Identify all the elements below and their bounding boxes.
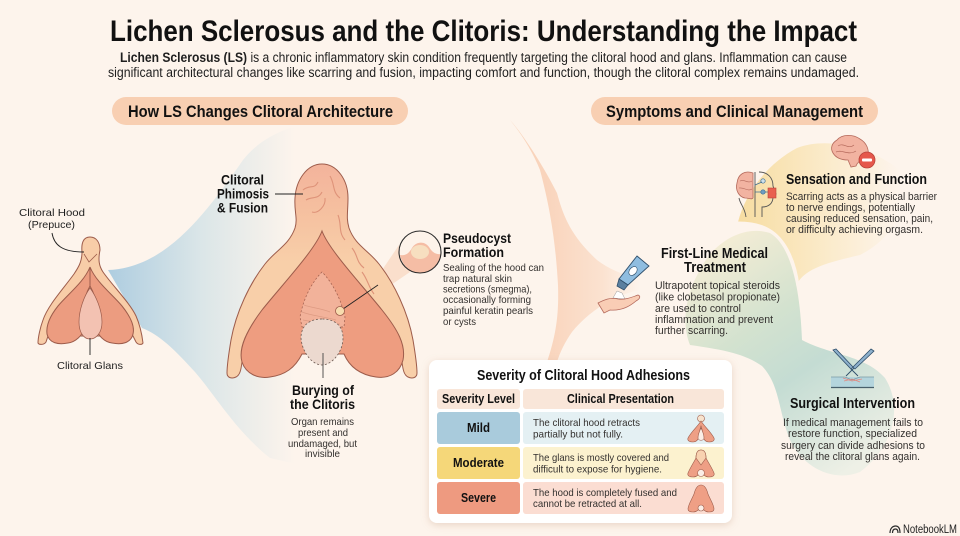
text: surgical intervention: restore function, specialized [788, 428, 917, 440]
text: sensation and function: causing reduced sensation, pain, [786, 213, 933, 225]
fused tissue over clitoris [300, 272, 345, 327]
diagram: anatomy with LS changes [227, 164, 417, 378]
text: surgical intervention: If medical management fails to [783, 417, 923, 429]
row: severe: Severe [461, 490, 496, 505]
text: pseudocyst formation: Sealing of the hood can [443, 262, 544, 274]
text: first-line medical treatment: First-Line Medical [661, 245, 768, 262]
text: first-line medical treatment [655, 245, 781, 337]
intro text: significant architectural changes like scarring and fusion, impacting comfort and function, though the clitoral complex remains undamaged. [108, 65, 859, 80]
row: moderate: The glans is mostly covered and [533, 452, 669, 464]
row: mild [437, 412, 724, 444]
label: burying of the clitoris: Organ remains [291, 416, 354, 428]
table header: Severity Level [442, 392, 515, 406]
text: surgical intervention: surgery can divide adhesions to [781, 440, 925, 452]
text: sensation and function: Scarring acts as a physical barrier [786, 191, 937, 203]
icon: surgical instruments [831, 349, 874, 388]
text: first-line medical treatment: Ultrapotent topical steroids [655, 280, 781, 292]
table header [437, 389, 724, 409]
left lobe [47, 267, 90, 344]
section heading: symptoms [591, 97, 878, 125]
buried glans [301, 319, 343, 365]
row: moderate: difficult to expose for hygiene. [533, 464, 662, 476]
pseudocyst marker [336, 285, 378, 316]
label: burying of the clitoris: the Clitoris [290, 396, 355, 412]
row: severe: cannot be retracted at all. [533, 498, 642, 510]
table header: Clinical Presentation [567, 392, 674, 406]
hood fold [84, 254, 97, 262]
text: surgical intervention: Surgical Intervention [790, 395, 915, 412]
glans [79, 288, 102, 339]
text: pseudocyst formation: occasionally forming [443, 294, 531, 306]
flow band: green treatment and surgery blob [685, 231, 894, 475]
diagram: normal anatomy [38, 237, 143, 344]
outer fused band [227, 164, 417, 378]
text: pseudocyst formation: or cysts [443, 316, 476, 328]
panel: severity table [429, 360, 732, 523]
row: moderate [437, 447, 724, 479]
row: severe: The hood is completely fused and [533, 487, 677, 499]
pale arc between yellow and green blobs [738, 223, 798, 286]
table title: Severity of Clitoral Hood Adhesions [477, 367, 690, 384]
icon: brain with minus sign [832, 135, 875, 168]
icon: mild [688, 415, 714, 442]
text: first-line medical treatment: inflammation and prevent [655, 314, 773, 326]
icon: steroid tube and hand [598, 256, 649, 313]
label: phimosis and fusion: & Fusion [217, 200, 268, 216]
text: pseudocyst formation: secretions (smegma), [443, 284, 532, 296]
label: clitoral hood [19, 207, 85, 252]
row: mild: The clitoral hood retracts [533, 417, 640, 429]
label: burying of the clitoris: undamaged, but [288, 438, 357, 450]
row: mild: partially but not fully. [533, 428, 623, 440]
text: sensation and function: or difficulty achieving orgasm. [786, 224, 923, 236]
inner salmon lobes [241, 231, 404, 377]
label: phimosis and fusion: Phimosis [217, 186, 269, 202]
row: moderate: Moderate [453, 455, 504, 470]
flow band: blue magnification wedge [108, 128, 300, 465]
text: pseudocyst formation: Pseudocyst [443, 230, 511, 246]
text: sensation and function: to nerve endings, potentially [786, 202, 916, 214]
label: phimosis and fusion: Clitoral [221, 172, 264, 188]
text: first-line medical treatment: further scarring. [655, 325, 728, 337]
label: clitoral hood: Clitoral Hood [19, 207, 85, 219]
text: pseudocyst formation: painful keratin pearls [443, 305, 533, 317]
hood and outer band [38, 237, 143, 344]
intro text: Lichen Sclerosus (LS) is a chronic inflammatory skin condition frequently targeting the clitoral hood and glans. Inflammation can cause [120, 50, 847, 65]
icon: severe [688, 485, 714, 512]
text: first-line medical treatment: Treatment [684, 259, 746, 276]
label: clitoral hood: (Prepuce) [28, 219, 75, 231]
flow band: yellow sensation blob [738, 143, 906, 284]
icon: pseudocyst magnifier [399, 231, 441, 273]
text: surgical intervention [781, 395, 925, 463]
row: mild: Mild [467, 420, 490, 435]
text: surgical intervention: reveal the clitoral glans again. [785, 451, 920, 463]
text: sensation and function [786, 171, 937, 236]
section heading: architecture [112, 97, 408, 125]
section heading: architecture: How LS Changes Clitoral Architecture [128, 102, 393, 121]
text: first-line medical treatment: are used to control [655, 303, 741, 315]
icon: head with nerve barrier [736, 172, 776, 217]
text: pseudocyst formation [443, 230, 544, 328]
section heading: symptoms: Symptoms and Clinical Management [606, 102, 863, 121]
intro text [108, 50, 859, 80]
label: phimosis and fusion [217, 172, 303, 216]
text: first-line medical treatment: (like clobetasol propionate) [655, 292, 780, 304]
scarring on hood [303, 176, 374, 294]
label: burying of the clitoris: present and [298, 427, 348, 439]
text: sensation and function: Sensation and Function [786, 171, 927, 188]
callout beam to pseudocyst [378, 245, 410, 287]
icon: moderate [688, 450, 714, 477]
text: pseudocyst formation: Formation [443, 244, 504, 260]
title: Lichen Sclerosus and the Clitoris: Understanding the Impact [110, 15, 857, 48]
flow band: peach swoosh [510, 120, 640, 362]
label: burying of the clitoris: Burying of [292, 382, 354, 398]
row: severe [437, 482, 724, 514]
right lobe [90, 267, 133, 344]
label: burying of the clitoris [288, 353, 357, 460]
label: clitoral glans: Clitoral Glans [57, 360, 123, 372]
label: clitoral glans [57, 338, 123, 372]
label: burying of the clitoris: invisible [305, 448, 340, 460]
text: pseudocyst formation: trap natural skin [443, 273, 512, 285]
